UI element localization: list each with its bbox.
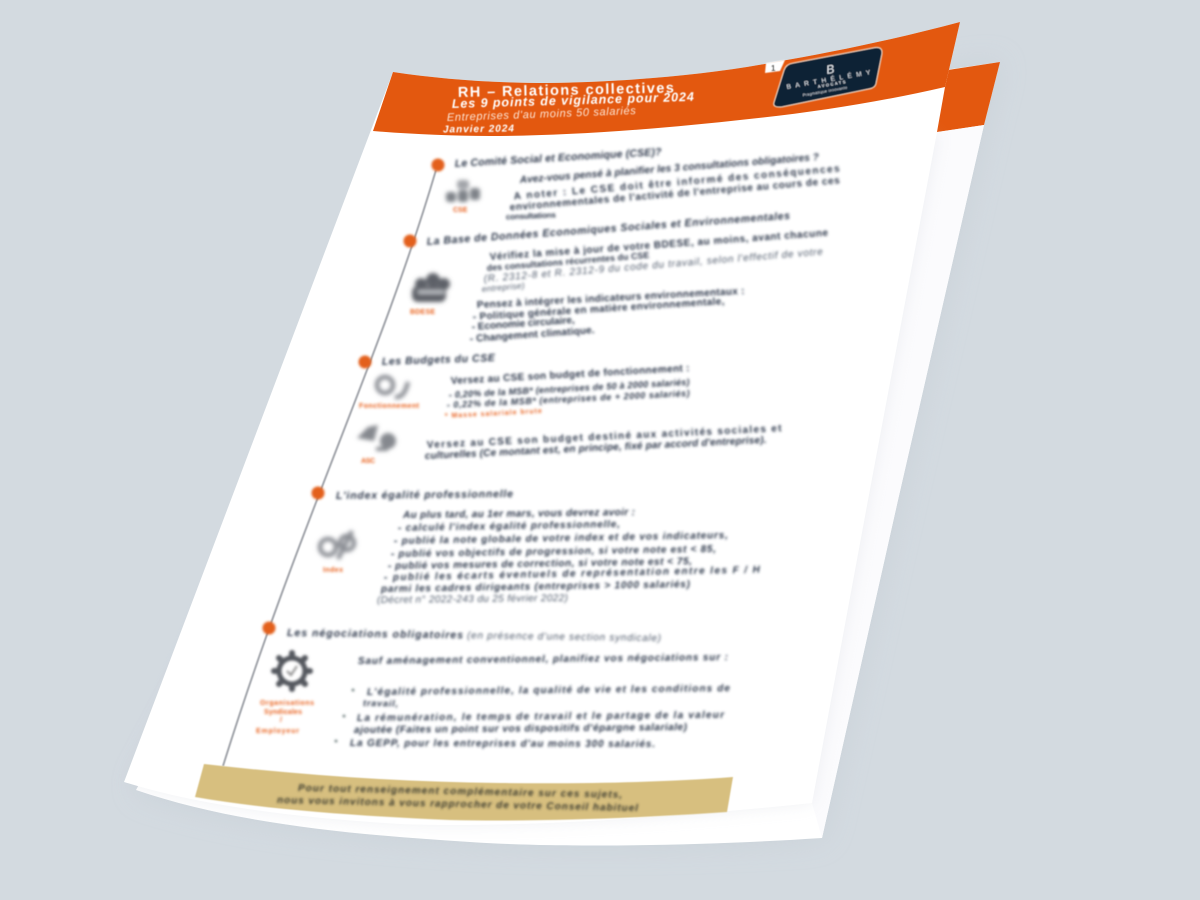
body 3b: culturelles (Ce montant est, en principe, fixé par accord d'entreprise).	[425, 435, 767, 462]
logo: Pragmatique innovante	[802, 86, 847, 97]
icon label: BDESE: BDESE	[410, 309, 435, 316]
icon label: negotiation parties: Syndicales	[264, 709, 302, 716]
body 4	[377, 507, 761, 606]
body 4: (Décret n° 2022-243 du 25 février 2022)	[377, 593, 568, 606]
icon label: negotiation parties: /	[280, 717, 282, 724]
header subtitle: Les 9 points de vigilance pour 2024	[452, 90, 694, 111]
section 1	[432, 146, 841, 221]
body 1: Avez-vous pensé à planifier les 3 consultations obligatoires ?	[518, 152, 819, 186]
body 2: Vérifiez la mise à jour de votre BDESE, au moins, avant chacune	[489, 228, 829, 263]
icon: ASC	[357, 425, 396, 451]
body 2: - Politique générale en matière environnementale,	[472, 296, 725, 323]
body 3a: * Masse salariale brute	[445, 408, 542, 420]
header band	[373, 22, 960, 136]
marker 3	[358, 356, 372, 368]
body 2: - Economie circulaire,	[471, 315, 575, 333]
body 4: - publié vos mesures de correction, si votre note est < 75,	[388, 556, 692, 572]
heading 5: Les négociations obligatoires	[287, 627, 463, 641]
body 1: A noter : Le CSE doit être informé des conséquences	[513, 164, 840, 202]
body 3a: Versez au CSE son budget de fonctionnement :	[451, 363, 690, 387]
icon: index	[320, 531, 354, 559]
page number: 1	[771, 64, 776, 73]
icon label: negotiation parties: Employeur	[256, 728, 299, 735]
icon label: negotiation parties	[256, 700, 314, 735]
logo: BARTHÉLÉMY	[786, 67, 872, 91]
body 5: travail,	[363, 698, 398, 709]
body 3b: Versez au CSE son budget destiné aux activités sociales et	[427, 423, 782, 451]
logo: B	[825, 62, 835, 77]
body 5: L'égalité professionnelle, la qualité de vie et les conditions de	[367, 683, 730, 698]
body 1: environnementales de l'activité de l'entreprise au cours de ces	[509, 175, 841, 213]
front sheet shadow	[124, 134, 937, 825]
section 4	[312, 486, 761, 606]
section 2	[404, 210, 829, 345]
header date: Janvier 2024	[443, 124, 514, 135]
body 3a: - 0,22% de la MSB* (entreprises de + 2000 salariés)	[447, 388, 690, 410]
logo: AVOCATS	[817, 79, 846, 89]
body 2	[469, 228, 829, 345]
body 2: Pensez à intégrer les indicateurs environnementaux :	[477, 286, 745, 311]
body 4: - publié vos objectifs de progression, si votre note est < 85,	[391, 544, 716, 560]
body 4: parmi les cadres dirigeants (entreprises > 1000 salariés)	[380, 579, 691, 595]
body 2: - Changement climatique.	[469, 325, 595, 345]
icon label: ASC: ASC	[361, 458, 375, 465]
footer text: nous vous invitons à vous rapprocher de votre Conseil habituel	[277, 795, 638, 814]
body 5: Sauf aménagement conventionnel, planifiez vos négociations sur :	[358, 652, 728, 667]
body 5: La GEPP, pour les entreprises d'au moins 300 salariés.	[350, 738, 655, 750]
body 4: - calculé l'index égalité professionnelle,	[398, 519, 620, 534]
marker 1	[432, 158, 444, 172]
body 2: entreprise)	[481, 280, 525, 294]
timeline	[223, 170, 436, 766]
icon label: index: Index	[323, 567, 343, 574]
back sheet	[136, 62, 1000, 845]
icon: fonctionnement	[377, 377, 408, 397]
heading 3: Les Budgets du CSE	[382, 352, 496, 368]
icon label: fonctionnement: Fonctionnement	[359, 403, 420, 410]
heading 2: La Base de Données Economiques Sociales et Environnementales	[426, 210, 790, 248]
body 2: des consultations récurrentes du CSE	[486, 250, 650, 273]
marker 5	[262, 622, 276, 634]
icon: gear	[274, 653, 310, 689]
body 3a	[445, 363, 690, 420]
section 3	[357, 352, 782, 465]
body 4: - publié la note globale de votre index et de vos indicateurs,	[394, 530, 728, 547]
icon label: negotiation parties: Organisations	[260, 700, 314, 707]
heading 4: L'index égalité professionnelle	[336, 488, 513, 502]
icon: CSE	[446, 180, 480, 202]
heading 5: (en présence d'une section syndicale)	[467, 631, 661, 644]
footer text: Pour tout renseignement complémentaire sur ces sujets,	[298, 783, 622, 801]
marker 2	[404, 234, 416, 248]
body 3a: - 0,20% de la MSB* (entreprises de 50 à 2000 salariés)	[449, 377, 690, 400]
body 4: - publié les écarts éventuels de représentation entre les F / H	[384, 565, 761, 583]
page number	[765, 60, 785, 73]
logo	[774, 47, 882, 107]
body 2: (R. 2312-8 et R. 2312-9 du code du travail, selon l'effectif de votre	[483, 247, 824, 285]
section 5	[256, 622, 730, 750]
heading 5	[287, 627, 661, 644]
header title: RH – Relations collectives	[458, 80, 674, 101]
body 5	[335, 652, 730, 750]
icon: BDESE	[412, 273, 450, 302]
marker 4	[312, 486, 324, 500]
body 5: ajoutée (Faites un point sur vos dispositifs d'épargne salariale)	[354, 722, 688, 736]
body 1	[506, 152, 841, 221]
footer text	[277, 783, 638, 814]
body 4: Au plus tard, au 1er mars, vous devrez avoir :	[402, 507, 635, 521]
body 1: consultations	[506, 210, 557, 221]
body 5: La rémunération, le temps de travail et le partage de la valeur	[357, 710, 725, 724]
header scope: Entreprises d'au moins 50 salariés	[447, 105, 636, 124]
header title	[443, 80, 694, 135]
footer callout	[195, 764, 733, 821]
front sheet	[124, 22, 960, 825]
icon label: CSE: CSE	[453, 207, 468, 214]
heading 1: Le Comité Social et Economique (CSE)?	[454, 146, 662, 170]
